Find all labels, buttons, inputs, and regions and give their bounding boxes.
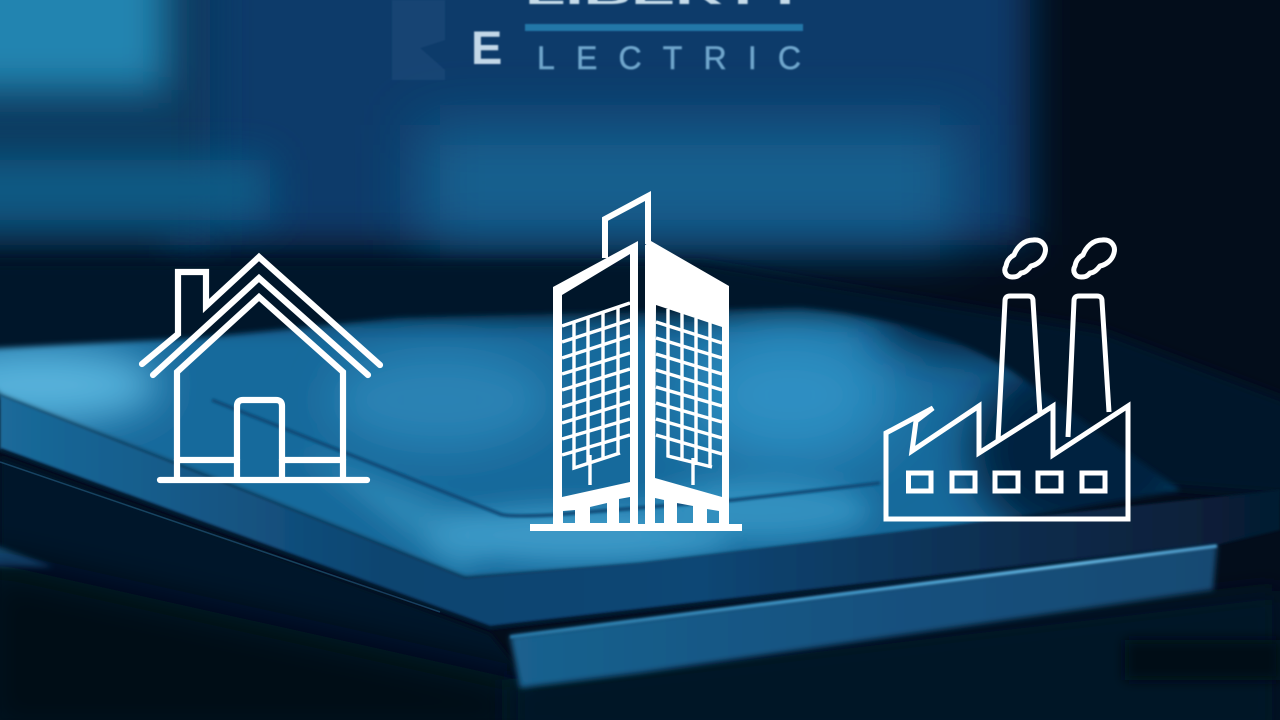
- factory body with sawtooth roof: [886, 406, 1128, 519]
- rooftop block: [605, 196, 648, 258]
- base bars: [177, 457, 343, 463]
- door: [237, 400, 282, 478]
- icon: office tower: [530, 196, 742, 531]
- ground line: [530, 524, 742, 531]
- logo letter E: E: [471, 21, 502, 74]
- outer roof with chimney: [142, 257, 380, 365]
- logo rule: [525, 24, 803, 31]
- left chimney: [998, 296, 1040, 441]
- logo mark: [392, 0, 445, 80]
- walls: [177, 297, 343, 478]
- icon: house: [142, 257, 380, 480]
- left window grid: [562, 303, 630, 485]
- logo word LECTRIC: LECTRIC: [537, 40, 801, 76]
- ground line: [160, 477, 367, 483]
- right smoke cloud: [1074, 240, 1114, 277]
- logo: blurred Liberty Electric wordmark: [392, 0, 807, 80]
- windows: [908, 473, 1105, 491]
- right window grid: [656, 309, 722, 485]
- icon: factory: [886, 240, 1128, 519]
- left facade: [553, 241, 638, 524]
- tablet screen glow: [0, 305, 1180, 579]
- right chimney: [1068, 296, 1109, 437]
- second roof line: [153, 278, 368, 375]
- right facade: [645, 241, 729, 524]
- left smoke cloud: [1005, 240, 1045, 277]
